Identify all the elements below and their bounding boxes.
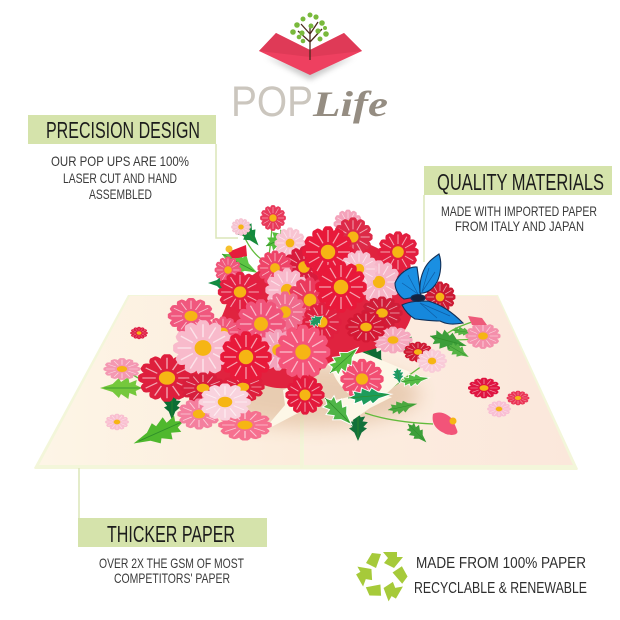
panel: quality materials — [424, 166, 612, 262]
pop-up card illustration — [34, 205, 578, 470]
pop-up cream paper panels — [262, 339, 410, 432]
text: recyclable note — [414, 555, 587, 597]
text: precision description: OUR POP UPS ARE 100% — [51, 153, 189, 169]
brand name: POP — [231, 78, 313, 126]
front leaves with white edges — [307, 311, 431, 433]
text: recyclable note: MADE FROM 100% PAPER — [416, 555, 586, 572]
text: thicker paper description: COMPETITORS' PAPER — [114, 570, 230, 586]
text: quality description — [441, 203, 597, 234]
panel: thicker paper — [78, 468, 267, 586]
panel: precision design — [28, 115, 238, 238]
logo — [231, 12, 388, 126]
butterfly — [395, 254, 463, 324]
text: thicker paper description — [99, 555, 244, 586]
bouquet backing — [182, 239, 414, 404]
card base — [34, 295, 578, 470]
card shadow — [200, 363, 420, 427]
icon: tree — [290, 12, 329, 60]
heading: thicker paper: THICKER PAPER — [107, 521, 235, 547]
text: precision description: ASSEMBLED — [89, 186, 152, 202]
heading: precision design: PRECISION DESIGN — [46, 117, 200, 143]
text: quality description: FROM ITALY AND JAPAN — [455, 218, 584, 234]
icon: red open book — [259, 33, 362, 80]
left and front flowers — [138, 272, 384, 440]
brand name: Life — [312, 84, 388, 124]
back row flowers — [215, 205, 501, 373]
scattered card flowers — [103, 327, 529, 435]
text: precision description — [51, 153, 189, 202]
brand name — [231, 78, 388, 126]
icon: recycling arrows — [353, 552, 411, 604]
stems — [130, 222, 474, 424]
text: precision description: LASER CUT AND HAND — [63, 170, 177, 186]
text: thicker paper description: OVER 2X THE GSM OF MOST — [99, 555, 244, 571]
leaves — [100, 215, 474, 455]
